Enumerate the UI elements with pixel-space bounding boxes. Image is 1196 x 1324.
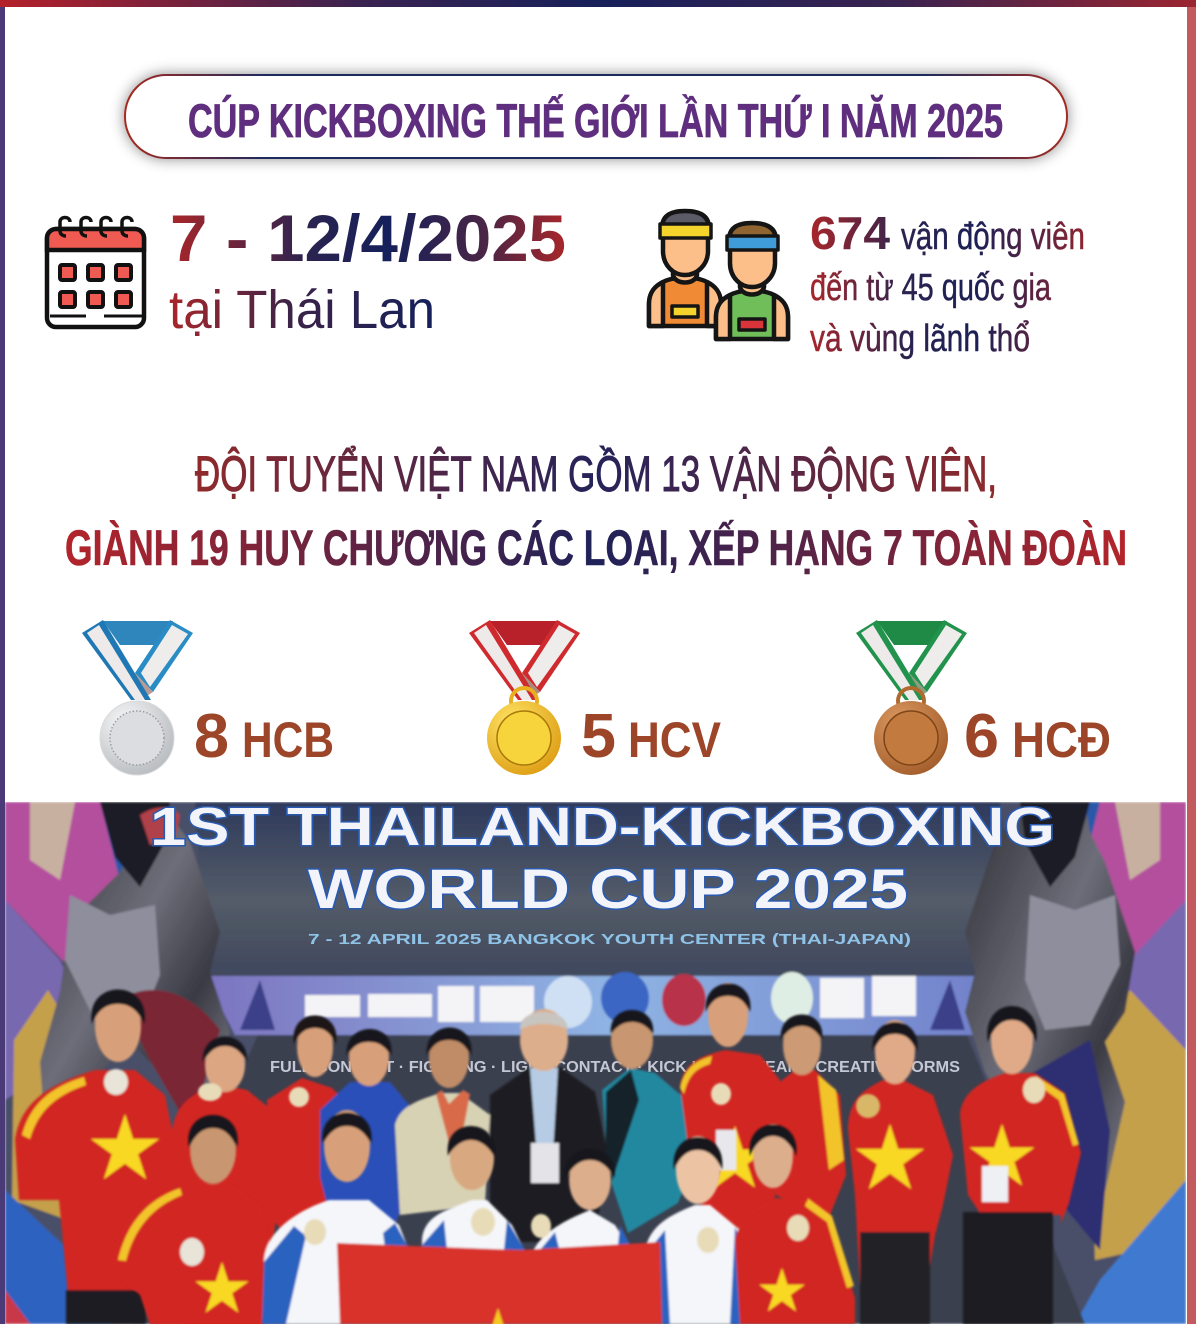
lower banner slogan: FULL CONTACT · FIGHTING · LIGHT CONTACT · KICK LIGHT · TEAM · CREATIVE FORMS (270, 1059, 960, 1076)
fighter left (39, 827, 230, 1095)
held medals (198, 1083, 880, 1253)
medal: bronze (856, 620, 967, 775)
person 3 (266, 1076, 339, 1230)
person a (110, 1185, 275, 1324)
person 4 (318, 1080, 410, 1224)
person 2 (172, 1085, 277, 1324)
person b (264, 1200, 419, 1324)
bronze count (964, 702, 1111, 771)
person 10 (848, 1080, 953, 1295)
person 11 (960, 1073, 1081, 1225)
person e (646, 1203, 740, 1324)
banner date: 7 - 12 APRIL 2025 BANGKOK YOUTH CENTER (THAI-JAPAN) (308, 931, 911, 948)
person 8 (680, 1050, 785, 1240)
person d (532, 1208, 622, 1252)
fighter right (965, 802, 1135, 1202)
banner backdrop (195, 802, 1020, 980)
gold count (581, 702, 722, 771)
athlete count text (810, 207, 1085, 360)
athlete count text: 674 (810, 207, 890, 259)
team photo (5, 797, 1186, 1324)
medal: gold (469, 620, 580, 775)
silver count (194, 702, 334, 771)
person 5 (395, 1093, 490, 1215)
person 1 (15, 1070, 177, 1305)
person 7 (602, 1068, 698, 1233)
icon: athletes (649, 211, 788, 339)
bronze count: HCĐ (1012, 712, 1111, 768)
flag (337, 1242, 662, 1324)
person 9 (770, 1070, 846, 1225)
silver count: 8 (194, 702, 229, 771)
person 6 (490, 1067, 607, 1242)
person c (420, 1198, 523, 1252)
athletes front row (110, 1083, 880, 1324)
person f (735, 1198, 855, 1324)
athlete count text: đến từ 45 quốc gia (810, 267, 1052, 309)
gold count: HCV (628, 712, 722, 768)
medal: silver (82, 620, 193, 775)
title pill (125, 75, 1067, 158)
bronze count: 6 (964, 702, 999, 771)
gold count: 5 (581, 702, 616, 771)
location: tại Thái Lan (169, 280, 435, 340)
athletes back row (15, 983, 1081, 1324)
logo strip (205, 976, 1020, 1035)
top gradient bar (0, 0, 1196, 7)
banner title: line 2: WORLD CUP 2025 (308, 857, 908, 920)
athlete count text: và vùng lãnh thổ (810, 318, 1030, 360)
date: 7 - 12/4/2025 (170, 201, 566, 275)
silver count: HCB (242, 712, 334, 768)
side decoration (5, 802, 120, 963)
athlete count text: vận động viên (901, 216, 1085, 258)
icon: calendar (47, 218, 144, 327)
banner title: line 1: 1ST THAILAND-KICKBOXING (150, 797, 1055, 857)
